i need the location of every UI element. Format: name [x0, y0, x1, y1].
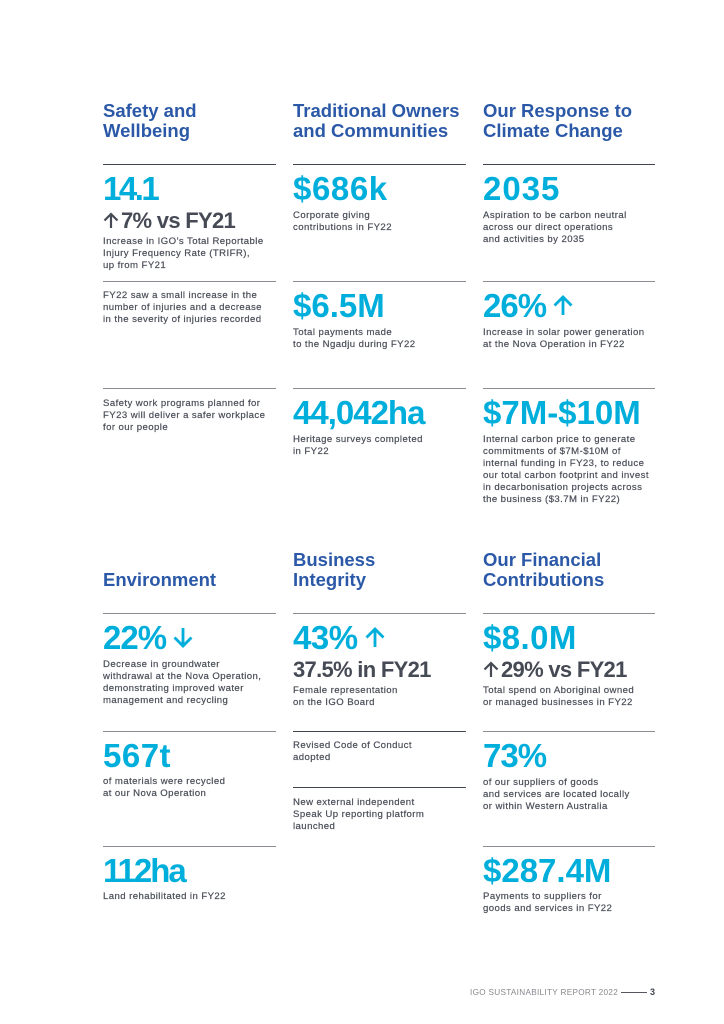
text: heritage surveys [293, 434, 423, 457]
text: Ngadju payments: Total payments made [293, 327, 392, 338]
stat: 43%: 43% [293, 619, 358, 656]
text: female representation: on the IGO Board [293, 697, 375, 708]
text: groundwater: demonstrating improved water [103, 683, 244, 694]
text: injuries note: FY22 saw a small increase in the [103, 290, 257, 301]
text: aboriginal spend [483, 685, 634, 708]
text: code of conduct: Revised Code of Conduct [293, 740, 412, 751]
text: TRIFR description: Increase in IGO’s Total Reportable [103, 236, 264, 247]
text: groundwater [102, 659, 261, 706]
stat: $287.4M: $287.4M [483, 852, 611, 889]
stat: 26%: 26% [483, 287, 546, 324]
text: supplier payments [483, 891, 612, 915]
text: female representation: Female representation [293, 685, 398, 696]
stat: $686k: $686k [293, 170, 388, 207]
stat: 14.1: 14.1 [103, 170, 157, 207]
text: carbon price: internal funding in FY23, to reduce [483, 458, 644, 469]
text: TRIFR description: up from FY21 [103, 260, 166, 271]
text: recycled materials [103, 776, 225, 799]
panel: 26% [483, 287, 644, 350]
text: safety programs note: FY23 will deliver a safer workplace [103, 410, 265, 421]
stat: 567t: 567t [103, 737, 171, 774]
text: Ngadju payments: to the Ngadju during FY22 [293, 339, 416, 350]
text: carbon price: in decarbonisation projects across [483, 482, 642, 493]
panel: 2035 [482, 170, 627, 245]
heading: Our Financial Contributions: Contributions [483, 568, 604, 590]
stat: 7% vs FY21: 7% vs FY21 [121, 208, 235, 233]
text: local suppliers: and services are located locally [483, 789, 630, 800]
icon: up arrow [554, 295, 572, 315]
stat: 44,042ha: 44,042ha [293, 394, 424, 431]
text: carbon price: commitments of $7M-$10M of [483, 446, 621, 457]
panel: $7M-$10M [483, 394, 649, 505]
text: code of conduct [293, 740, 412, 763]
text: safety programs note: Safety work programs planned for [103, 398, 260, 409]
panel: 567t [103, 737, 225, 799]
heading: Safety and Wellbeing: Safety and [103, 100, 197, 121]
text: solar generation: Increase in solar power generation [483, 327, 644, 338]
icon: up arrow [366, 627, 384, 647]
text: groundwater: Decrease in groundwater [103, 659, 220, 670]
stat: 37.5% in FY21: 37.5% in FY21 [293, 657, 431, 682]
text: speak up platform: New external independent [293, 797, 415, 808]
text: local suppliers: of our suppliers of goods [483, 777, 599, 788]
panel: $287.4M [483, 852, 612, 914]
panel: 14.1 TRIFR [103, 170, 264, 271]
panel: 43% [293, 619, 431, 708]
text: safety programs note [103, 398, 265, 433]
stat: 73%: 73% [483, 737, 546, 774]
heading: Our Response to Climate Change [483, 100, 632, 141]
stat: 112ha: 112ha [103, 852, 185, 889]
heading: Traditional Owners and Communities: Traditional Owners [293, 100, 460, 121]
text: carbon price: the business ($3.7M in FY22) [483, 494, 620, 505]
text: injuries note: number of injuries and a decrease [103, 302, 262, 313]
stat: $8.0M: $8.0M [483, 619, 577, 656]
text: carbon neutral: Aspiration to be carbon neutral [483, 210, 627, 221]
heading: Our Financial Contributions: Our Financial [483, 549, 601, 570]
text: aboriginal spend: or managed businesses in FY22 [483, 697, 633, 708]
text: recycled materials: at our Nova Operation [103, 788, 206, 799]
text: supplier payments: Payments to suppliers for [483, 891, 602, 902]
panel: $686k [293, 170, 392, 233]
heading: Safety and Wellbeing: Wellbeing [103, 120, 190, 140]
footer [470, 986, 656, 999]
text: carbon price: Internal carbon price to generate [483, 434, 636, 445]
text: groundwater: management and recycling [103, 695, 228, 706]
panel: 73% [483, 737, 630, 812]
text: injuries note [103, 290, 262, 325]
text: speak up platform: launched [293, 821, 335, 832]
text: corporate giving: Corporate giving [293, 210, 370, 221]
page number: 3 [650, 987, 655, 997]
text: code of conduct: adopted [293, 752, 331, 763]
heading: Traditional Owners and Communities: and Communities [293, 120, 448, 140]
icon: down arrow [174, 628, 192, 648]
text: solar generation: at the Nova Operation in FY22 [483, 339, 625, 350]
text: supplier payments: goods and services in FY22 [483, 903, 612, 914]
text: carbon neutral [482, 210, 627, 245]
text: speak up platform [293, 797, 424, 832]
heading: Our Response to Climate Change: Climate Change [483, 120, 623, 140]
text: carbon price [483, 434, 649, 505]
stat: 2035: 2035 [483, 170, 560, 207]
text: injuries note: in the severity of injuries recorded [103, 314, 262, 325]
panel: 44,042ha [293, 394, 426, 457]
panel: $8.0M [483, 619, 634, 708]
heading: Business Integrity: Integrity [293, 568, 366, 590]
text: heritage surveys: Heritage surveys completed [293, 434, 423, 445]
icon: up arrow [484, 662, 498, 677]
panel: 22% [102, 619, 261, 706]
panel: $6.5M [293, 287, 416, 350]
text: land rehabilitated: Land rehabilitated in FY22 [103, 891, 226, 902]
footer rule [621, 992, 647, 993]
stat: $7M-$10M: $7M-$10M [483, 394, 641, 431]
footer text: IGO SUSTAINABILITY REPORT 2022 [470, 988, 618, 997]
panel: 112ha [103, 852, 226, 902]
text: carbon neutral: and activities by 2035 [483, 234, 585, 245]
rule [103, 164, 276, 165]
text: carbon neutral: across our direct operations [483, 222, 613, 233]
text: TRIFR description: Injury Frequency Rate (TRIFR), [103, 248, 250, 259]
heading: Business Integrity: Business [293, 549, 375, 570]
heading: Traditional Owners and Communities [293, 100, 460, 140]
text: carbon price: our total carbon footprint and invest [483, 470, 649, 481]
text: Ngadju payments [293, 327, 416, 350]
text: groundwater: withdrawal at the Nova Operation, [103, 671, 261, 682]
text: speak up platform: Speak Up reporting platform [293, 809, 424, 820]
text: safety programs note: for our people [103, 422, 168, 433]
text: local suppliers [483, 777, 630, 812]
text: aboriginal spend: Total spend on Aboriginal owned [483, 685, 634, 696]
icon: up arrow [104, 212, 118, 228]
text: recycled materials: of materials were recycled [103, 776, 225, 787]
heading: Environment: Environment [103, 569, 216, 590]
heading: Our Financial Contributions [483, 549, 604, 590]
heading: Our Response to Climate Change: Our Response to [483, 100, 632, 121]
text: female representation [293, 685, 398, 708]
stat: 22%: 22% [103, 619, 166, 656]
text: corporate giving [293, 210, 392, 233]
text: solar generation [483, 327, 644, 350]
stat: 29% vs FY21: 29% vs FY21 [501, 657, 627, 682]
text: local suppliers: or within Western Australia [483, 801, 608, 812]
text: heritage surveys: in FY22 [293, 446, 329, 457]
text: corporate giving: contributions in FY22 [293, 222, 392, 233]
stat: $6.5M: $6.5M [293, 287, 385, 324]
text: TRIFR description [103, 236, 264, 271]
heading: Safety and Wellbeing [103, 100, 197, 141]
heading: Business Integrity [293, 549, 375, 590]
